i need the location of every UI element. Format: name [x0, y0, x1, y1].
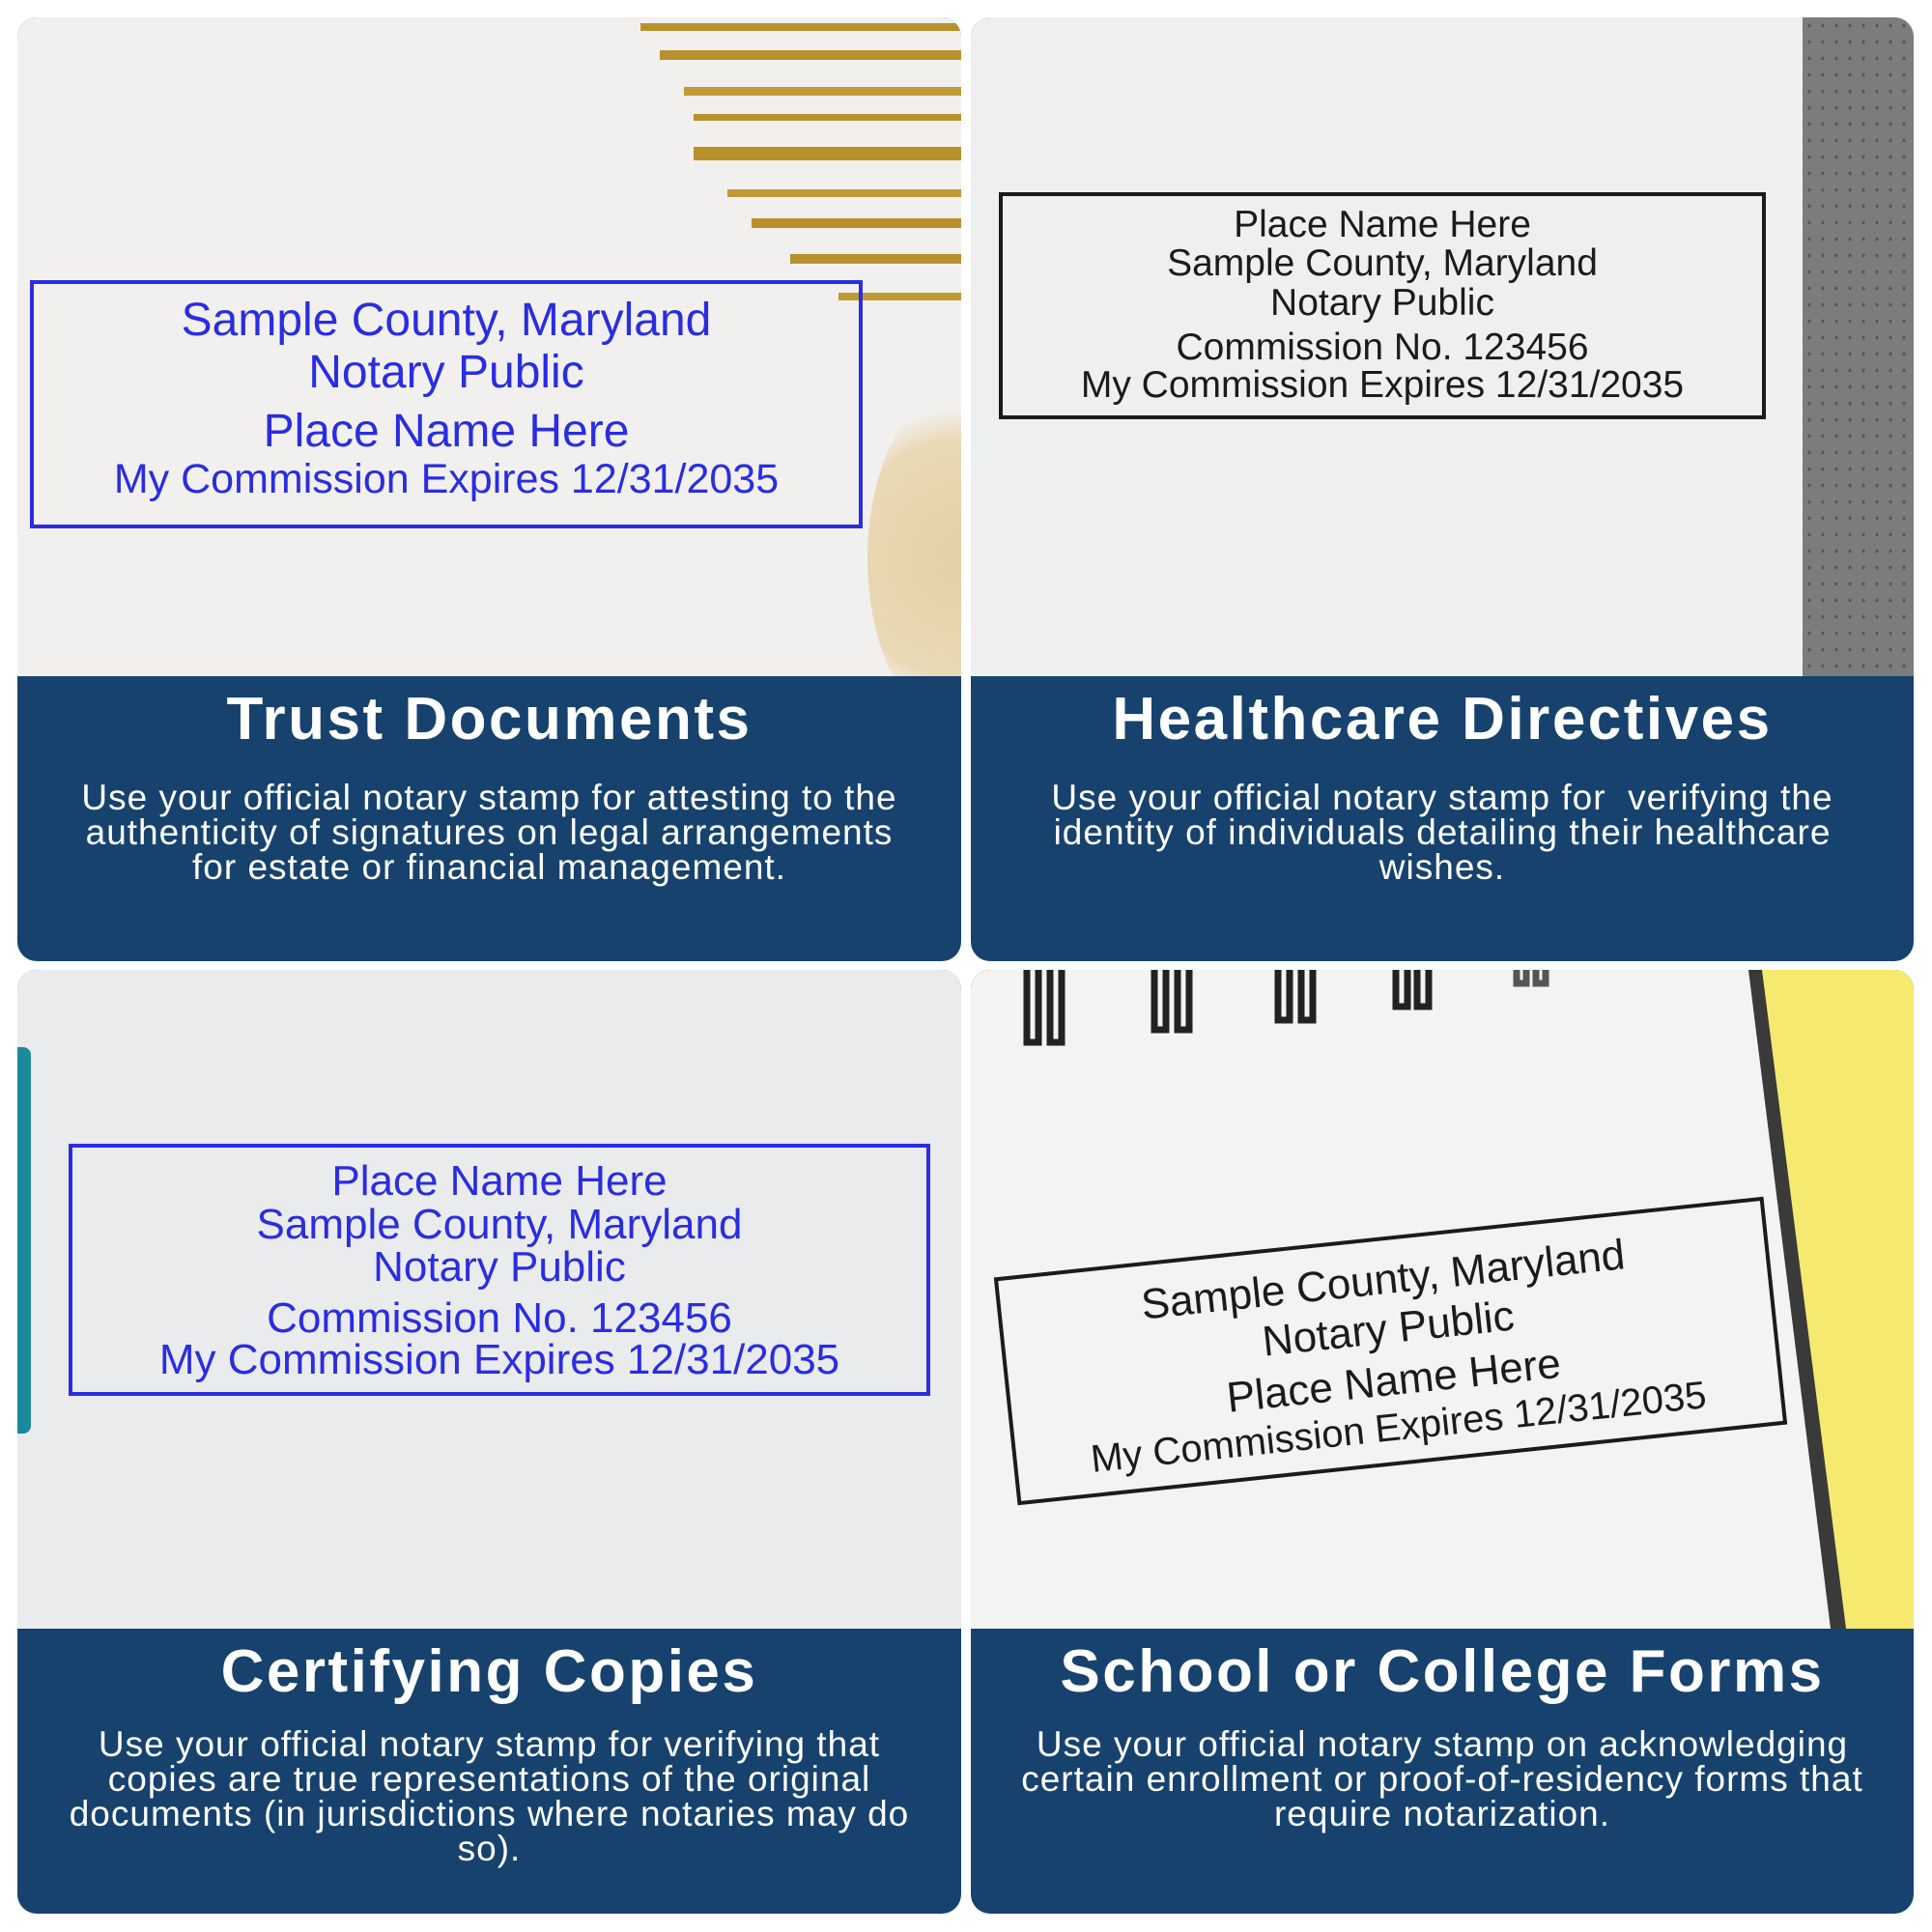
stamp: blue copies stamp: Place Name Here [331, 1157, 668, 1205]
photo: notebook on yellow [971, 970, 1914, 1629]
caption: trust documents [81, 686, 897, 887]
caption: healthcare directives: identity of individuals detailing their healthcare [1054, 812, 1831, 852]
stamp: blue trust stamp: Notary Public [308, 347, 584, 398]
caption: healthcare directives [1051, 686, 1833, 887]
caption: healthcare directives: wishes. [1379, 847, 1505, 887]
stamp: blue copies stamp [69, 1144, 930, 1396]
stamp: blue trust stamp [30, 280, 863, 528]
panel: certifying copies [17, 970, 961, 1914]
panel: healthcare directives [971, 17, 1914, 961]
stamp: black healthcare stamp [999, 192, 1766, 419]
stamp: rotated black school stamp: Sample County, Maryland [1139, 1231, 1627, 1329]
stamp: blue copies stamp: My Commission Expires 12/31/2035 [159, 1336, 839, 1383]
stamp: black healthcare stamp: My Commission Expires 12/31/2035 [1081, 364, 1684, 406]
stamp: rotated black school stamp: Place Name Here [1224, 1340, 1563, 1422]
stamp: blue trust stamp: Sample County, Maryland [182, 295, 711, 346]
photo: textured paper with teal edge [17, 970, 961, 1629]
stamp: blue copies stamp: Sample County, Maryland [257, 1201, 742, 1248]
photo: paper with gold stripes [17, 17, 961, 676]
caption: certifying copies [70, 1638, 909, 1868]
stamp: black healthcare stamp: Sample County, Maryland [1167, 242, 1598, 284]
caption: school or college forms: School or College Forms [1060, 1638, 1825, 1705]
stamp: rotated black school stamp: Notary Public [1260, 1293, 1517, 1366]
stamp: blue trust stamp: My Commission Expires 12/31/2035 [114, 456, 779, 502]
stamp: black healthcare stamp: Notary Public [1270, 282, 1494, 324]
caption: certifying copies: Use your official notary stamp for verifying that [99, 1724, 880, 1764]
caption: trust documents: Trust Documents [227, 686, 752, 753]
stamp: black healthcare stamp: Commission No. 123456 [1176, 327, 1589, 368]
caption: school or college forms: Use your official notary stamp on acknowledging [1037, 1724, 1848, 1764]
stamp: blue copies stamp: Commission No. 123456 [267, 1294, 732, 1342]
caption: trust documents: for estate or financial management. [192, 847, 786, 887]
caption: healthcare directives: Use your official notary stamp for verifying the [1051, 778, 1833, 817]
stamp: blue copies stamp: Notary Public [373, 1243, 626, 1291]
caption: trust documents: authenticity of signatures on legal arrangements [86, 812, 893, 852]
stamp: blue trust stamp: Place Name Here [264, 406, 629, 457]
caption: school or college forms [1021, 1638, 1863, 1833]
caption: trust documents: Use your official notary stamp for attesting to the [81, 778, 897, 817]
caption: certifying copies: so). [458, 1829, 521, 1868]
stamp: black healthcare stamp: Place Name Here [1234, 204, 1531, 245]
stamp: rotated black school stamp: My Commission Expires 12/31/2035 [1089, 1374, 1708, 1481]
panel: school or college forms [971, 970, 1914, 1914]
caption: certifying copies: documents (in jurisdictions where notaries may do [70, 1794, 909, 1833]
caption: school or college forms: require notarization. [1274, 1794, 1610, 1833]
caption: certifying copies: copies are true representations of the original [108, 1759, 870, 1799]
caption: certifying copies: Certifying Copies [221, 1638, 757, 1705]
caption: healthcare directives: Healthcare Directives [1112, 686, 1773, 753]
photo: white paper with stone edge [971, 17, 1914, 676]
stamp: rotated black school stamp [994, 1197, 1787, 1505]
caption: school or college forms: certain enrollment or proof-of-residency forms that [1021, 1759, 1863, 1799]
panel: trust documents [17, 17, 961, 961]
